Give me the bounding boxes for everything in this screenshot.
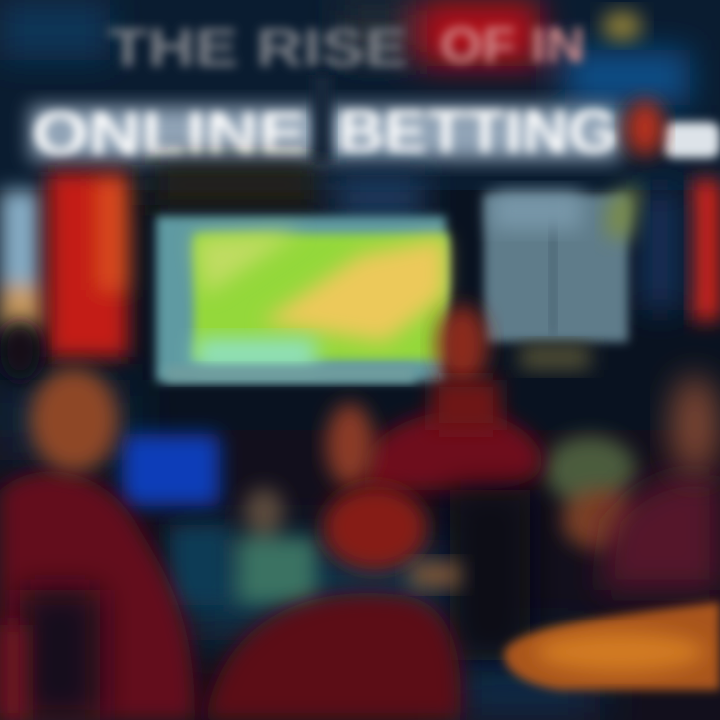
background wash bbox=[0, 380, 600, 720]
centre person neck bbox=[432, 380, 500, 430]
panel: main green screen bbox=[156, 216, 448, 382]
figure: right person bbox=[600, 375, 720, 590]
orange table bbox=[504, 602, 720, 690]
cyan lower strip bbox=[196, 338, 316, 370]
figure: left person bbox=[0, 368, 195, 720]
panel: right red banner bbox=[692, 180, 720, 320]
panel: left wall screen bbox=[0, 190, 42, 330]
background seated figures bbox=[170, 436, 638, 605]
white banner glow bbox=[30, 106, 620, 160]
red accent ball bbox=[626, 100, 664, 156]
screen field bbox=[194, 234, 448, 360]
board column divider bbox=[550, 205, 556, 335]
table top bbox=[504, 602, 720, 690]
pale corner highlight bbox=[195, 232, 300, 295]
top banner lights bbox=[0, 0, 690, 105]
panel: blue monitor bbox=[122, 434, 220, 506]
front person shoulders bbox=[205, 593, 461, 720]
panel: grey data board bbox=[484, 184, 640, 370]
board header bbox=[492, 192, 582, 230]
right person head bbox=[670, 375, 720, 475]
banner right word: BETTING bbox=[338, 98, 618, 165]
centre person dark legs bbox=[450, 490, 530, 660]
centre person arm bbox=[326, 403, 374, 487]
screen bottom edge bbox=[165, 366, 415, 382]
front person hood bbox=[323, 486, 427, 570]
title line one: THE RISE bbox=[108, 18, 408, 78]
left person head bbox=[30, 368, 118, 472]
board body bbox=[484, 194, 628, 342]
table highlight bbox=[535, 632, 705, 672]
front person collar glow bbox=[410, 562, 460, 588]
yellow diagonal band bbox=[262, 238, 445, 342]
panel: left red banner bbox=[48, 172, 130, 357]
figure: front person bbox=[205, 486, 461, 720]
figure: centre standing person bbox=[326, 305, 542, 660]
title line two bbox=[30, 98, 620, 167]
monitor glow bbox=[122, 434, 220, 506]
banner divider post bbox=[312, 75, 332, 165]
centre person body bbox=[365, 411, 542, 490]
banner left word: ONLINE bbox=[32, 100, 307, 167]
banner far right fragment bbox=[664, 122, 720, 158]
left edge dark foreground bbox=[0, 320, 40, 720]
centre person head bbox=[436, 305, 488, 385]
title bbox=[30, 11, 720, 167]
board lower lights bbox=[520, 344, 590, 370]
panel: upper wall lights bbox=[150, 165, 680, 310]
left person body bbox=[0, 471, 195, 720]
board yellow accent bbox=[605, 184, 640, 240]
right person body bbox=[600, 475, 720, 590]
title accent word: OF IN bbox=[440, 17, 585, 73]
yellow accent bbox=[602, 11, 642, 41]
left chair dark bbox=[20, 590, 100, 720]
screen frame bbox=[156, 216, 446, 382]
